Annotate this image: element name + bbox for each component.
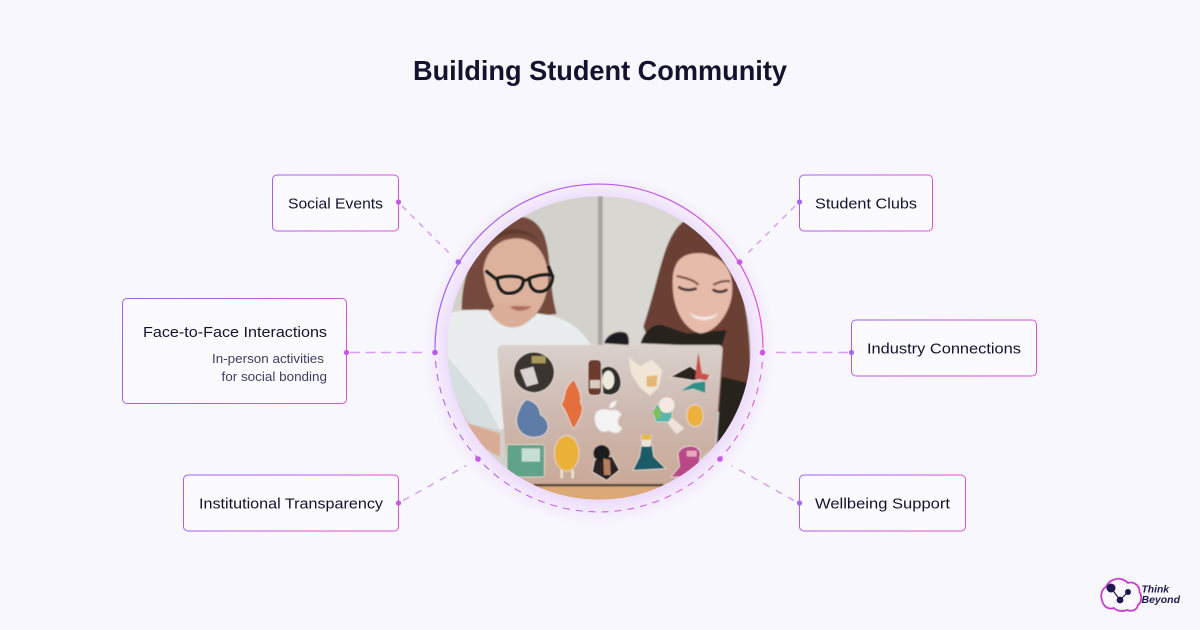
box: Industry Connections xyxy=(849,320,1036,376)
description text: In-person activities xyxy=(212,352,324,366)
connector lines xyxy=(350,206,848,500)
box: Face-to-Face Interactions xyxy=(122,298,349,404)
photo: two students at a laptop xyxy=(440,190,760,510)
connector dots xyxy=(432,259,765,462)
box: Social Events: Social Events xyxy=(288,196,383,212)
description text: for social bonding xyxy=(222,370,327,384)
photo glow xyxy=(423,174,775,526)
box: Face-to-Face Interactions: Face-to-Face Interactions xyxy=(143,324,327,341)
logo wordmark: Beyond xyxy=(1142,595,1181,606)
ring: dashed lower arc xyxy=(435,348,763,512)
box: Student Clubs: Student Clubs xyxy=(815,196,917,212)
logo: Think Beyond xyxy=(1101,579,1181,611)
glasses xyxy=(486,266,553,293)
description text xyxy=(212,352,327,384)
box: Institutional Transparency: Institutional Transparency xyxy=(199,496,384,512)
logo wordmark: Think xyxy=(1142,584,1169,596)
box: Industry Connections: Industry Connections xyxy=(867,340,1021,358)
box: Wellbeing Support: Wellbeing Support xyxy=(815,496,951,512)
box: Institutional Transparency xyxy=(184,475,401,531)
box: Social Events xyxy=(272,175,401,231)
infographic canvas xyxy=(122,60,1180,612)
logo wordmark xyxy=(1142,584,1181,606)
ring: solid upper arc xyxy=(435,184,763,348)
box: Wellbeing Support xyxy=(797,475,966,531)
laptop stickers xyxy=(507,352,709,480)
title: Building Student Community xyxy=(413,55,787,86)
circular photo with ring xyxy=(423,174,775,526)
box: Student Clubs xyxy=(797,175,932,231)
icon: cloud network xyxy=(1101,579,1141,611)
